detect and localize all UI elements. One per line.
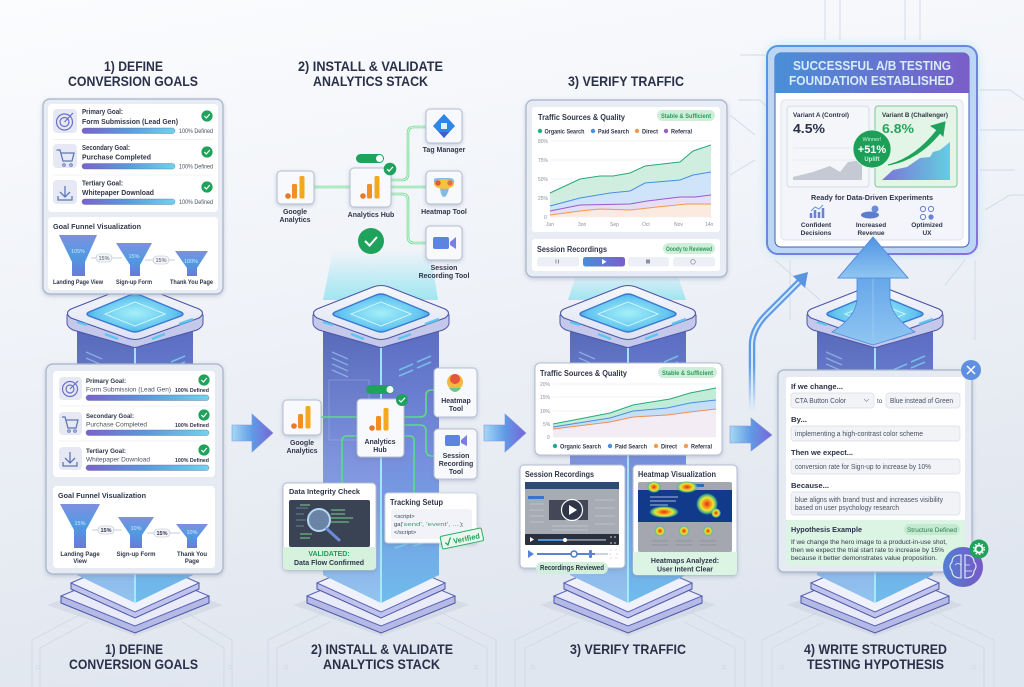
toggle (366, 385, 394, 394)
tracking setup card: <script> (394, 514, 415, 520)
tower 2 (293, 286, 469, 636)
legend (538, 128, 692, 136)
outcome card: Ready for Data-Driven Experiments (811, 193, 933, 202)
google analytics tile (277, 171, 314, 224)
tracking setup card: Tracking Setup (390, 498, 443, 507)
heatmap image (638, 481, 732, 552)
benefit labels: Increased (856, 222, 886, 229)
bottom title 2: ANALYTICS STACK (323, 656, 440, 672)
area chart: Jun (546, 222, 554, 228)
goal funnel: 15% (128, 254, 140, 260)
ga tile: Google (290, 440, 314, 447)
video thumbnail (525, 482, 619, 545)
area chart: Sep (610, 222, 619, 228)
funnel: Thank You (177, 552, 207, 558)
tertiary goal row: 100% Defined (179, 200, 213, 206)
goal funnel: 15% (155, 258, 167, 264)
legend: Organic Search (544, 128, 585, 136)
large up arrow (832, 237, 915, 345)
ga tile (283, 400, 321, 455)
header banner: FOUNDATION ESTABLISHED (789, 73, 954, 88)
area chart: 80% (538, 139, 549, 145)
bottom title 1: 1) DEFINE (105, 641, 163, 657)
hypothesis card: Blue instead of Green (890, 398, 953, 405)
tertiary goal row (53, 180, 213, 206)
goal funnel: Thank You Page (170, 280, 214, 286)
status pill: Stable & Sufficient (661, 113, 712, 120)
secondary row: Purchase Completed (86, 422, 147, 428)
google analytics tile: Google (283, 209, 307, 216)
bottom title 4: 4) WRITE STRUCTURED (804, 641, 947, 657)
funnel: 10% (186, 530, 198, 536)
bottom title 4: TESTING HYPOTHESIS (807, 656, 944, 672)
goal funnel (53, 222, 214, 286)
top title 1: 1) DEFINE (104, 58, 163, 74)
line chart: 0 (547, 435, 550, 441)
tower 1 (47, 286, 223, 636)
hypothesis card: to (877, 398, 883, 405)
tag manager tile: Tag Manager (423, 147, 466, 154)
verified badge (440, 528, 484, 549)
up arrow head over card (838, 237, 908, 278)
light beams (323, 250, 686, 300)
gear badge (970, 540, 988, 558)
primary row: Primary Goal: (86, 378, 126, 385)
google analytics tile: Analytics (279, 217, 311, 224)
small check (384, 163, 396, 175)
funnel: 15% (100, 528, 112, 534)
top title 1 (68, 58, 198, 89)
session tile: Session (431, 265, 457, 272)
legend: Direct (661, 444, 678, 450)
hypothesis example: Structure Defined (907, 527, 957, 534)
benefit labels: Revenue (857, 230, 885, 237)
area chart (538, 139, 714, 228)
primary goal row: 100% Defined (179, 129, 213, 135)
secondary goal row (53, 144, 213, 170)
secondary row: Secondary Goal: (86, 413, 134, 420)
bottom traffic card (535, 363, 722, 455)
funnel: 15% (74, 521, 86, 527)
line chart: 20% (540, 382, 551, 388)
small check (396, 394, 408, 406)
data integrity card (283, 483, 376, 570)
bottom title 1: CONVERSION GOALS (69, 656, 198, 672)
area chart: 75% (538, 158, 549, 164)
session recordings strip: Ooody to Reviewed (666, 247, 712, 253)
area chart: 25% (538, 196, 549, 202)
heatmap card: User Intent Clear (657, 566, 713, 574)
hypothesis card: CTA Button Color (795, 398, 847, 405)
line chart (540, 382, 716, 441)
bottom title 4 (804, 641, 947, 672)
status pill: Recordings Reviewed (540, 565, 604, 572)
heatmap tile (421, 171, 467, 216)
bottom analytics stack diagram (283, 368, 484, 570)
goal funnel: 105% (71, 249, 85, 255)
hypothesis card: based on user psychology research (795, 505, 899, 512)
heatmap tile: Heatmap Tool (421, 209, 467, 216)
curved arrow to outcome (752, 272, 808, 410)
line chart: 15% (540, 395, 551, 401)
heatmap tile: Tool (449, 406, 463, 413)
hypothesis card: If we change... (791, 382, 843, 391)
top analytics stack diagram (277, 109, 469, 280)
variant b (875, 106, 957, 187)
heatmap card (633, 465, 737, 575)
tower 3 (540, 286, 716, 636)
area chart: 50% (538, 177, 549, 183)
benefit labels: Optimized (911, 222, 943, 229)
area chart: 3on (578, 222, 587, 228)
session tile (434, 429, 477, 479)
tracking setup card: 'send', 'event', ... (402, 522, 460, 528)
heatmap card: Heatmap Visualization (638, 470, 716, 479)
primary goal row: Form Submission (Lead Gen) (82, 119, 178, 126)
hypothesis card: blue aligns with brand trust and increases visibility (795, 497, 943, 504)
session tile: Tool (449, 469, 463, 476)
bottom title 2: 2) INSTALL & VALIDATE (311, 641, 453, 657)
toggle (356, 154, 384, 163)
tertiary goal row: Whitepaper Download (82, 190, 154, 197)
close button (961, 360, 981, 380)
funnel (58, 491, 208, 565)
large check (358, 228, 384, 254)
hypothesis card (778, 370, 972, 572)
hub tile: Hub (373, 447, 387, 454)
variant a: 4.5% (793, 121, 825, 136)
bottom traffic card: Stable & Sufficient (662, 370, 714, 377)
session recordings strip (537, 243, 715, 266)
outcome card (767, 46, 977, 254)
area chart: Nov (674, 222, 683, 228)
funnel: 10% (130, 526, 142, 532)
session recordings card (520, 465, 625, 574)
tertiary goal row: Tertiary Goal: (82, 180, 123, 188)
funnel: Page (185, 559, 200, 565)
primary row: 100% Defined (175, 388, 209, 394)
status pill (657, 110, 715, 121)
legend: Paid Search (615, 444, 647, 450)
hypothesis example: Hypothesis Example (791, 525, 862, 534)
hub tile (357, 399, 404, 457)
data integrity card: VALIDATED: (308, 551, 350, 558)
variant b: Variant B (Challenger) (882, 112, 948, 119)
session tile: Session (443, 453, 469, 460)
session tile: Recording (439, 461, 473, 468)
funnel: View (73, 559, 87, 565)
hypothesis card: By... (791, 415, 807, 424)
benefit labels: Confident (801, 222, 832, 229)
goal funnel: Landing Page View (53, 280, 103, 286)
funnel: Goal Funnel Visualization (58, 491, 146, 500)
bottom title 1 (69, 641, 198, 672)
funnel: 15% (156, 531, 168, 537)
session tile: Recording Tool (419, 273, 469, 280)
winner badge: Winner! (863, 137, 882, 143)
legend: Organic Search (560, 444, 601, 450)
secondary goal row: Purchase Completed (82, 154, 151, 162)
heatmap tile (434, 368, 477, 417)
tertiary row: Whitepaper Download (86, 456, 150, 464)
line chart: 5% (543, 422, 551, 428)
session recordings strip: Session Recordings (537, 245, 607, 254)
hypothesis card: Because... (791, 481, 829, 490)
variant b: 6.8% (882, 121, 914, 136)
hypothesis example: If we change the hero image to a product-in-use shot, (791, 539, 947, 546)
top card: conversion goals (43, 99, 223, 294)
primary row: Form Submission (Lead Gen) (86, 386, 171, 394)
bottom title 2 (311, 641, 453, 672)
goal funnel: 100% (184, 259, 198, 265)
session tile (419, 226, 469, 280)
variant a: Variant A (Control) (793, 112, 849, 119)
tertiary row: Tertiary Goal: (86, 448, 126, 455)
heatmap card: Heatmaps Analyzed: (651, 558, 719, 565)
hub tile: Analytics Hub (348, 212, 394, 219)
arrow 3 (730, 418, 772, 451)
top traffic card: Traffic Sources & Quality (538, 113, 626, 122)
header banner: SUCCESSFUL A/B TESTING (793, 58, 951, 73)
legend: Referral (671, 128, 692, 136)
hypothesis card: Then we expect... (791, 448, 853, 457)
tracking setup card (385, 493, 477, 543)
primary goal row (53, 109, 213, 135)
line chart: 10% (540, 409, 551, 415)
player controls (528, 550, 617, 558)
brain icon (943, 547, 983, 587)
bottom traffic card: Traffic Sources & Quality (540, 369, 628, 378)
funnel: Landing Page (60, 552, 100, 558)
session recordings card: Session Recordings (525, 470, 594, 479)
header banner (775, 53, 969, 93)
top traffic card (526, 100, 727, 277)
tracking setup card: ); (460, 522, 464, 528)
secondary row: 100% Defined (175, 423, 209, 429)
hypothesis example (791, 524, 960, 562)
tower 4 (787, 286, 963, 636)
top title 1: CONVERSION GOALS (68, 73, 198, 89)
top title 2 (298, 58, 443, 89)
variant a (787, 106, 869, 187)
arrow 1 (232, 414, 273, 452)
winner badge (853, 130, 891, 168)
secondary row (59, 409, 210, 436)
hub tile: Analytics (364, 439, 396, 446)
hypothesis card: implementing a high-contrast color scheme (795, 431, 923, 438)
bottom card: conversion goals (46, 364, 223, 574)
area chart: 0 (544, 215, 547, 221)
goal funnel: Goal Funnel Visualization (53, 222, 141, 231)
secondary goal row: 100% Defined (179, 164, 213, 170)
legend: Referral (691, 444, 712, 450)
secondary goal row: Secondary Goal: (82, 145, 130, 152)
input fields (791, 393, 960, 515)
tracking setup card: ga( (394, 522, 402, 528)
top title 2: ANALYTICS STACK (313, 73, 428, 89)
tertiary row: 100% Defined (175, 458, 209, 464)
benefit labels: Decisions (801, 230, 832, 237)
hub tile (348, 168, 394, 219)
heatmap tile: Heatmap (441, 398, 471, 405)
primary row (59, 374, 210, 400)
top title 3: 3) VERIFY TRAFFIC (568, 73, 684, 89)
benefit labels (801, 222, 943, 237)
data integrity card: Data Integrity Check (289, 487, 361, 496)
area chart: Oct (642, 222, 650, 228)
legend: Paid Search (598, 128, 629, 136)
ga tile: Analytics (286, 448, 318, 455)
benefit labels: UX (922, 230, 932, 237)
hypothesis card: conversion rate for Sign-up to increase by 10% (795, 464, 931, 471)
tertiary row (59, 444, 210, 470)
hypothesis example: then we expect the trial start rate to increase by 15% (791, 547, 944, 554)
tracking setup card: </script> (394, 530, 417, 536)
top title 2: 2) INSTALL & VALIDATE (298, 58, 443, 74)
tag manager tile (423, 109, 466, 154)
arrow 2 (484, 414, 526, 452)
benefit icons (811, 205, 934, 220)
winner badge: Uplift (864, 157, 880, 163)
funnel: Sign-up Form (116, 552, 156, 558)
goal funnel: 15% (98, 256, 110, 262)
legend: Direct (642, 128, 659, 136)
hypothesis example: because it better demonstrates value proposition. (791, 555, 937, 562)
primary goal row: Primary Goal: (82, 109, 123, 116)
bottom title 3: 3) VERIFY TRAFFIC (570, 641, 686, 657)
connectors (314, 127, 426, 243)
verified badge: Verified (452, 531, 481, 546)
legend (553, 444, 712, 450)
goal funnel: Sign-up Form (116, 280, 152, 286)
data integrity card: Data Flow Confirmed (294, 560, 364, 567)
winner badge: +51% (858, 144, 886, 156)
area chart: 14n (705, 222, 714, 228)
